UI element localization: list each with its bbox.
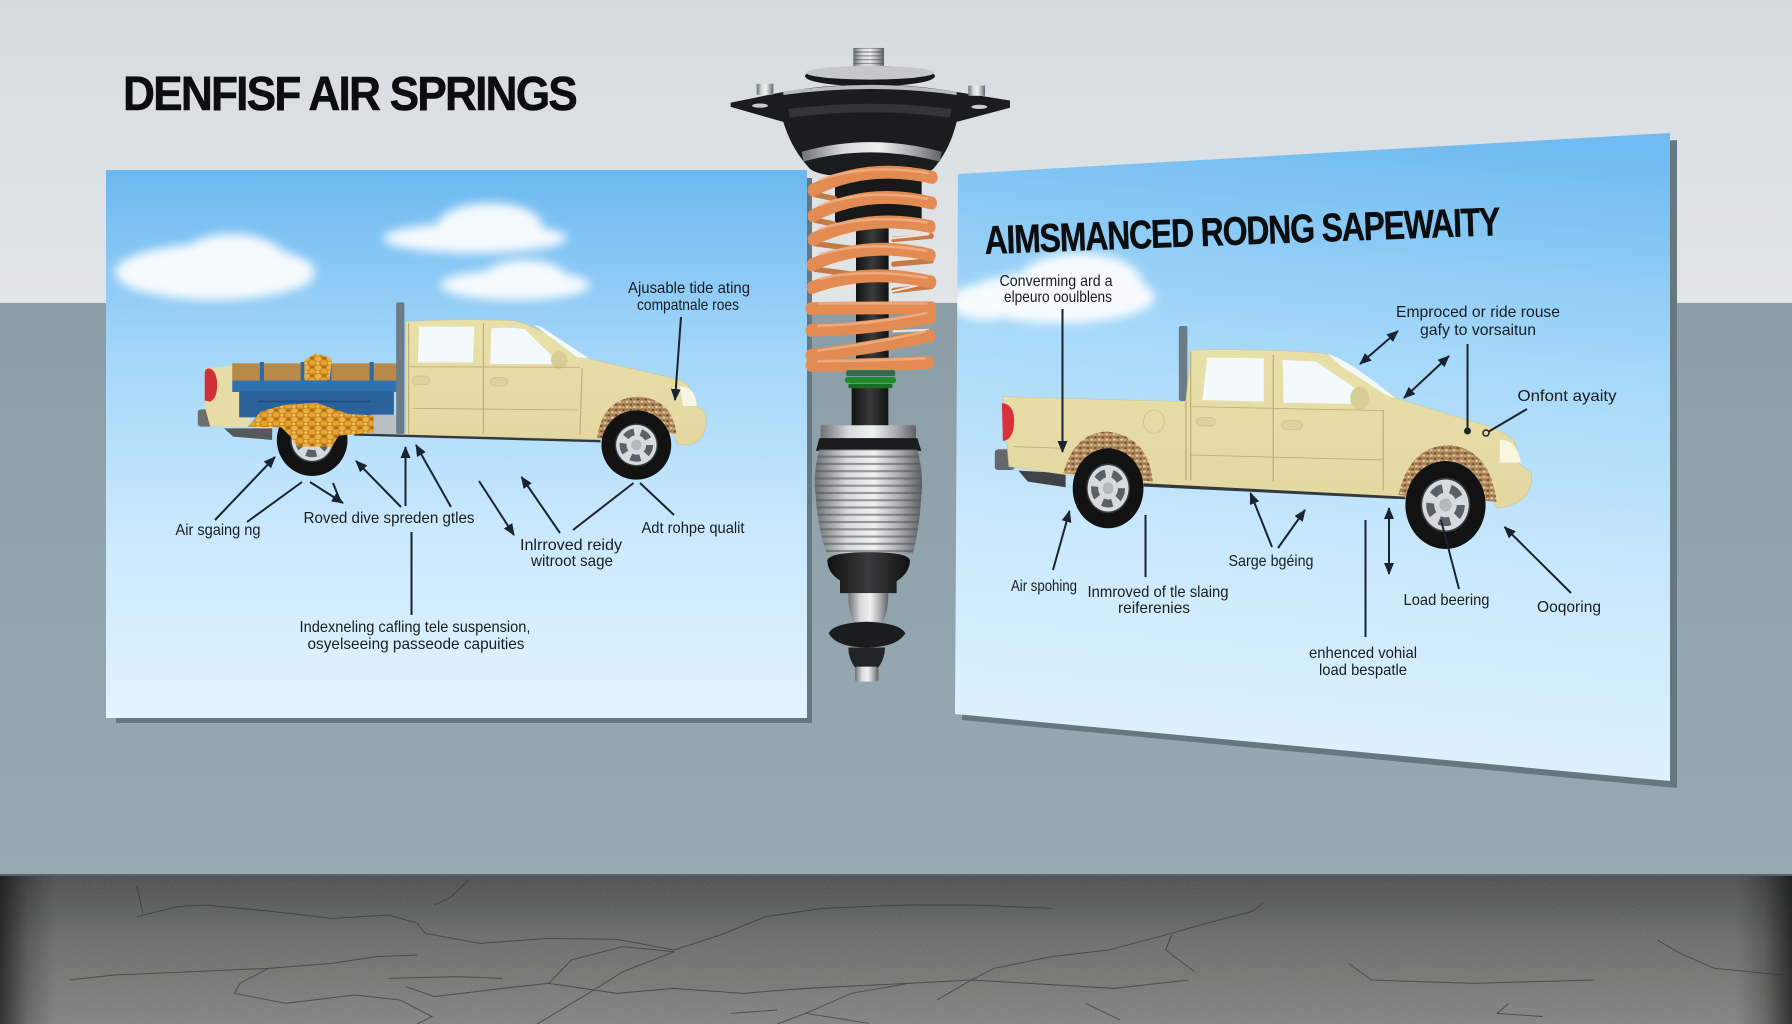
callout labels: Sarge bgéing xyxy=(1228,553,1314,570)
lower shaft xyxy=(852,388,888,427)
cloud xyxy=(950,253,1155,323)
callout labels: gafy to vorsaitun xyxy=(1420,322,1536,339)
callout labels: Load beering xyxy=(1404,592,1490,609)
cracked concrete floor xyxy=(0,874,1792,1024)
callout arrows xyxy=(215,317,681,615)
callout labels: load bespatle xyxy=(1319,662,1407,679)
green bump-stop rings xyxy=(845,370,896,388)
callout labels: reiferenies xyxy=(1118,600,1190,617)
panel sky background xyxy=(106,170,807,718)
callout labels: Ooqoring xyxy=(1537,599,1601,616)
threaded top stud xyxy=(853,48,884,66)
background wall: upper light band xyxy=(0,0,1792,303)
callout labels xyxy=(176,280,750,653)
top mounting plate xyxy=(731,66,1010,177)
panel sky background xyxy=(955,133,1670,781)
callout labels: osyelseeing passeode capuities xyxy=(308,636,524,653)
damper rod xyxy=(835,177,922,372)
callout labels xyxy=(1000,273,1616,679)
callout labels: Converming ard a xyxy=(1000,273,1113,290)
callout labels: Onfont ayaity xyxy=(1518,388,1616,405)
callout labels: Adt rohpe qualit xyxy=(642,520,745,537)
truck side view xyxy=(995,326,1532,549)
callout labels: Roved dive spreden gtles xyxy=(304,510,474,527)
callout labels: Inmroved of tle slaing xyxy=(1088,584,1228,601)
callout labels: compatnale roes xyxy=(637,297,739,314)
truck side view with cargo bed xyxy=(198,302,706,480)
panel title: AIMSMANCED RODNG SAPEWAITY xyxy=(984,200,1501,263)
callout labels: Ajusable tide ating xyxy=(628,280,750,297)
callout labels: elpeuro ooulblens xyxy=(1004,289,1112,306)
callout arrows xyxy=(1053,309,1571,637)
callout labels: Air sgaing ng xyxy=(176,522,260,539)
callout labels: Inlrroved reidy xyxy=(520,537,622,554)
callout labels: Indexneling cafling tele suspension, xyxy=(300,619,530,636)
air spring bellows xyxy=(815,425,922,682)
panel: right truck diagram xyxy=(950,133,1677,788)
background wall: lower grey band xyxy=(0,303,1792,875)
panel shadow xyxy=(962,140,1677,788)
panel shadow xyxy=(116,178,812,723)
callout labels: Emproced or ride rouse xyxy=(1396,304,1560,321)
callout labels: enhenced vohial xyxy=(1309,645,1417,662)
callout labels: Air spohing xyxy=(1011,578,1077,595)
panel: left truck diagram xyxy=(106,170,812,723)
main title: DENFISF AIR SPRINGS xyxy=(123,68,577,121)
clouds xyxy=(115,203,590,300)
central air spring and coil strut xyxy=(731,48,1010,682)
callout labels: witroot sage xyxy=(530,553,613,570)
orange coil spring xyxy=(811,169,933,365)
